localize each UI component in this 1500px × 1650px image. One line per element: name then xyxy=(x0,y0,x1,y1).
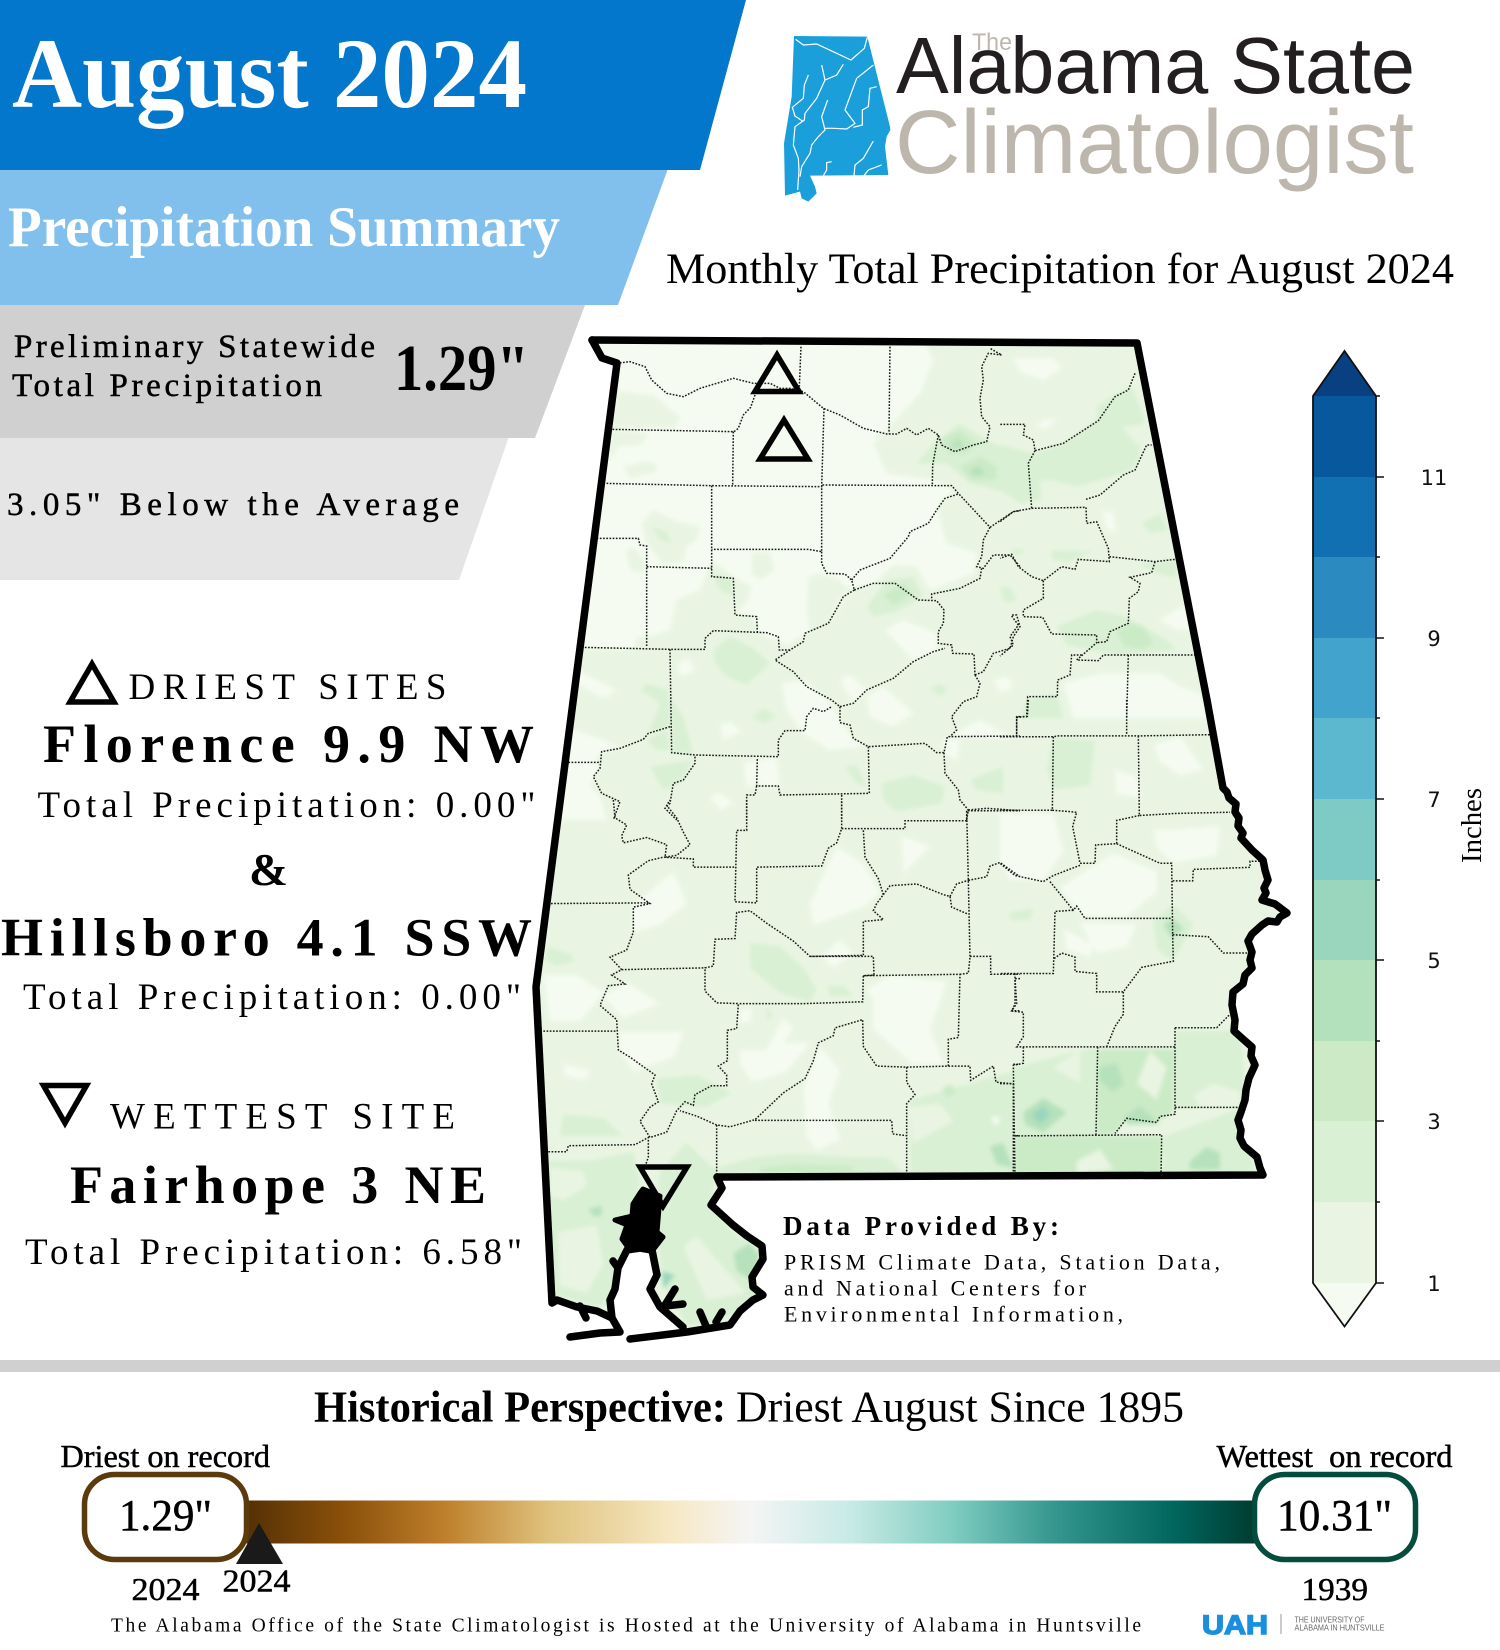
text: preliminary statewide total precipitation xyxy=(12,329,375,404)
state outline xyxy=(536,340,1287,1339)
logo: University of Alabama in Huntsville: THE UNIVERSITY OF xyxy=(1294,1616,1365,1624)
colorbar ticks: 1 xyxy=(1427,1272,1441,1296)
colorbar ticks: 5 xyxy=(1427,949,1441,973)
heading: historical perspective: Driest August Since 1895 xyxy=(736,1382,1184,1432)
legend: wettest site xyxy=(25,1086,522,1273)
box: driest value: 1.29" xyxy=(119,1491,212,1540)
county boundaries xyxy=(543,347,1260,1176)
colorbar ticks: 9 xyxy=(1427,627,1441,651)
text block: data provided by: Data Provided By: xyxy=(783,1211,1059,1241)
range bar: driest to wettest xyxy=(60,1438,1452,1607)
marker: driest site Florence xyxy=(755,355,799,392)
year: driest record: 2024 xyxy=(132,1571,200,1607)
heading: historical perspective: Historical Perspective: xyxy=(314,1382,726,1432)
value: 1.29 inches: 1.29" xyxy=(394,332,529,405)
text: The: The xyxy=(972,29,1012,56)
title: August 2024: August 2024 xyxy=(12,18,527,129)
logo: University of Alabama in Huntsville: ALABAMA IN HUNTSVILLE xyxy=(1294,1624,1384,1632)
icon: up triangle xyxy=(70,664,114,702)
panel: month banner xyxy=(0,0,746,170)
box: driest value xyxy=(84,1474,246,1560)
divider band xyxy=(0,1360,1500,1372)
text: Alabama State: Alabama State xyxy=(896,21,1415,110)
panel: departure from average xyxy=(0,438,508,580)
marker: 2024 position xyxy=(236,1523,283,1564)
heading: wettest site: WETTEST SITE xyxy=(110,1096,455,1138)
site: Fairhope 3 NE: Fairhope 3 NE xyxy=(70,1155,486,1215)
icon: down triangle xyxy=(44,1086,86,1123)
value: Fairhope precipitation: Total Precipitation: 6.58" xyxy=(25,1232,522,1273)
colorbar ticks: 7 xyxy=(1427,788,1441,812)
colorbar label: Inches: Inches xyxy=(1457,788,1488,863)
text block: data provided by: PRISM Climate Data, Station Data, xyxy=(784,1250,1220,1274)
precipitation shading xyxy=(540,344,1280,1328)
colorbar ticks: 11 xyxy=(1421,466,1447,490)
text: Climatologist: Climatologist xyxy=(895,93,1414,193)
box: wettest value: 10.31" xyxy=(1277,1491,1392,1540)
logo: University of Alabama in Huntsville: UAH xyxy=(1202,1610,1268,1640)
heading: historical perspective xyxy=(314,1382,1184,1432)
panel: precipitation summary banner xyxy=(0,170,668,305)
label: driest on record: Driest on record xyxy=(60,1438,270,1474)
year: wettest record: 1939 xyxy=(1302,1571,1368,1607)
value: Florence precipitation: Total Precipitation: 0.00" xyxy=(38,785,536,826)
text: preliminary statewide total precipitation: Preliminary Statewide xyxy=(14,329,375,365)
logo: Alabama State Climatologist xyxy=(784,21,1415,202)
logo: University of Alabama in Huntsville xyxy=(1202,1610,1384,1640)
bay blob xyxy=(615,1189,663,1250)
icon: Alabama state with rivers xyxy=(784,36,890,202)
map: Alabama precipitation xyxy=(532,336,1291,1343)
text: ampersand: & xyxy=(249,844,288,895)
text block: data provided by: Environmental Information, xyxy=(784,1302,1123,1326)
text block: data provided by xyxy=(783,1211,1220,1326)
heading: driest sites: DRIEST SITES xyxy=(128,667,446,708)
label: wettest on record: Wettest on record xyxy=(1216,1438,1452,1474)
site: Hillsboro 4.1 SSW: Hillsboro 4.1 SSW xyxy=(1,908,532,968)
text: below the average: 3.05" Below the Average xyxy=(7,487,459,523)
footer text: The Alabama Office of the State Climatologist is Hosted at the University of Alabama in Huntsville xyxy=(111,1616,1141,1636)
colorbar: inches xyxy=(1313,351,1488,1326)
text block: data provided by: and National Centers for xyxy=(784,1276,1087,1300)
gradient bar xyxy=(245,1500,1255,1544)
year: marker: 2024 xyxy=(222,1562,290,1598)
panel: statewide total xyxy=(0,305,585,438)
value: Hillsboro precipitation: Total Precipitation: 0.00" xyxy=(23,977,521,1018)
text: preliminary statewide total precipitation: Total Precipitation xyxy=(12,368,322,404)
colorbar ticks xyxy=(1376,396,1447,1296)
heading: Precipitation Summary: Precipitation Summary xyxy=(8,196,560,259)
site: Florence 9.9 NW: Florence 9.9 NW xyxy=(43,714,534,774)
heading: map title: Monthly Total Precipitation for August 2024 xyxy=(666,246,1454,293)
colorbar ticks: 3 xyxy=(1427,1110,1441,1134)
marker: driest site Hillsboro xyxy=(760,420,808,459)
marker: wettest site Fairhope xyxy=(640,1167,687,1206)
legend: driest sites xyxy=(1,664,536,1018)
box: wettest value xyxy=(1254,1474,1416,1560)
